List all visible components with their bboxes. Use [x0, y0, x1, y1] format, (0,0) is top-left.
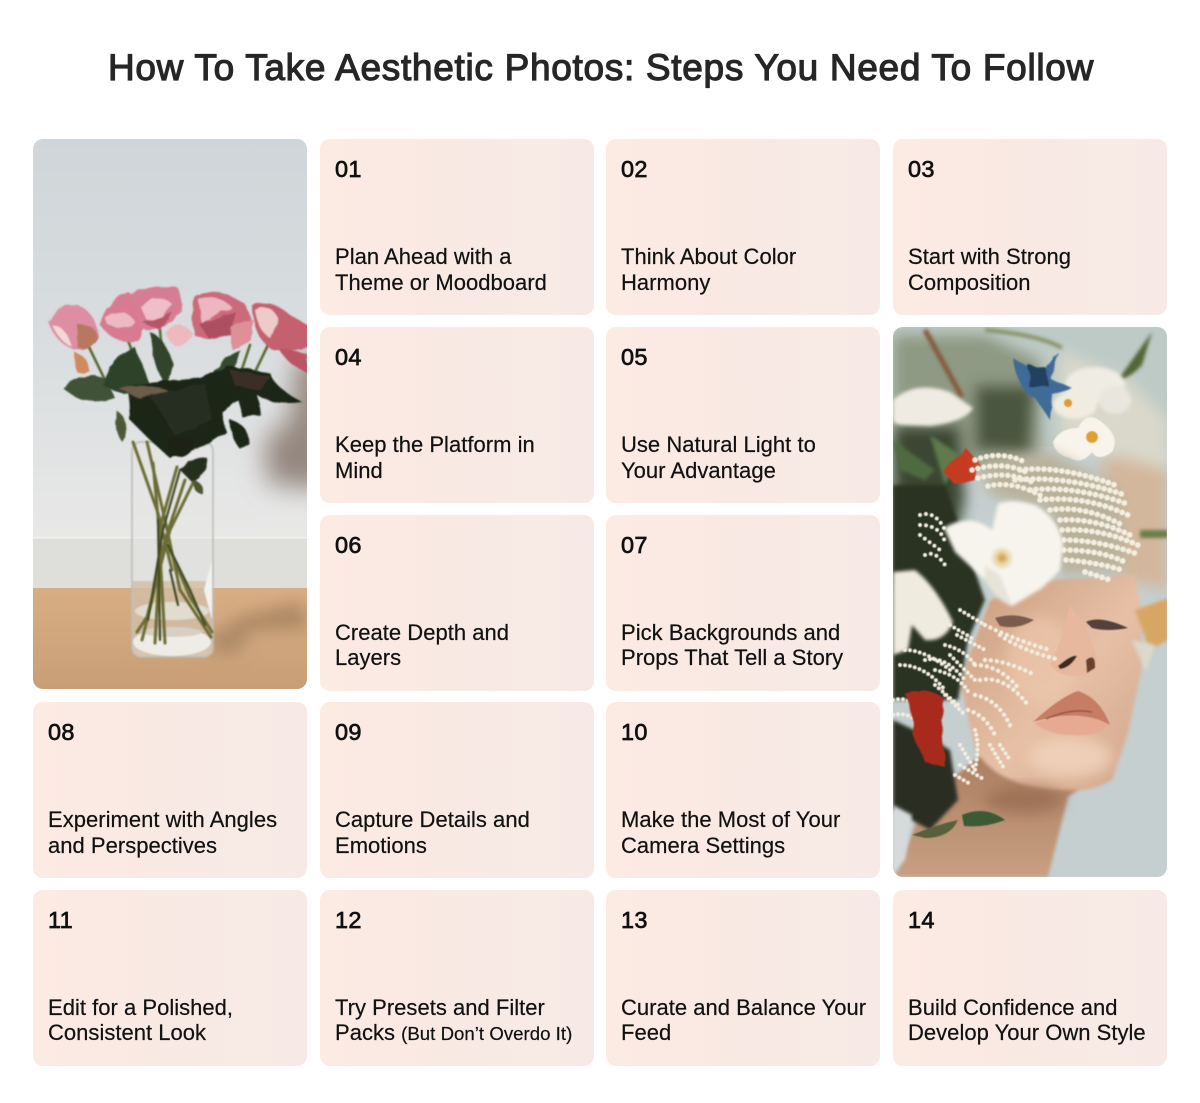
step label: Consistent Look — [48, 1020, 206, 1045]
photo: woman's face with flower crown — [893, 327, 1167, 877]
step number: 05 — [621, 344, 648, 370]
step label: Harmony — [621, 270, 710, 294]
rose stems — [88, 330, 268, 643]
photo: pink roses in a glass vase — [33, 139, 307, 689]
step label — [621, 807, 840, 858]
facial features — [995, 605, 1128, 736]
card 01 — [320, 139, 594, 315]
soft white blossoms, top right — [1053, 367, 1131, 419]
step number: 02 — [621, 156, 648, 182]
step number: 09 — [335, 719, 362, 745]
cherry blossom — [1053, 399, 1115, 460]
step label: Build Confidence and — [908, 994, 1118, 1020]
red petal — [903, 690, 945, 767]
step label — [335, 620, 509, 670]
step label: Camera Settings — [621, 832, 785, 858]
big white flower — [944, 501, 1063, 606]
leaves — [63, 332, 302, 495]
step number: 03 — [908, 156, 935, 182]
step label: Keep the Platform in — [335, 432, 535, 457]
card 02 — [606, 139, 880, 315]
blue cornflower — [1012, 352, 1072, 420]
dark foliage, lower left — [893, 720, 958, 830]
step number: 07 — [621, 532, 648, 558]
glass vase — [132, 442, 213, 657]
step label: Edit for a Polished, — [48, 994, 233, 1020]
step number: 13 — [621, 906, 648, 932]
card 05 — [606, 327, 880, 503]
step number: 08 — [48, 719, 75, 745]
white peony, left — [893, 388, 973, 426]
step label — [335, 994, 572, 1045]
card 09 — [320, 702, 594, 878]
neck and shoulder — [895, 740, 1090, 877]
neck leaves — [912, 811, 1005, 838]
step label: Experiment with Angles — [48, 807, 277, 832]
blurred background foliage — [893, 335, 1168, 590]
step label: Curate and Balance Your — [621, 994, 866, 1020]
step label: Try Presets and Filter — [335, 994, 545, 1020]
step label: and Perspectives — [48, 832, 217, 858]
step label: Plan Ahead with a — [335, 244, 511, 269]
red poppy — [942, 448, 982, 485]
step label — [335, 244, 547, 294]
step label — [335, 807, 530, 858]
step label: Theme or Moodboard — [335, 270, 547, 294]
step label — [48, 807, 277, 858]
step label: Pick Backgrounds and — [621, 620, 840, 644]
step label: Feed — [621, 1020, 671, 1045]
card 11 — [33, 890, 307, 1066]
step label: Capture Details and — [335, 807, 530, 832]
step number: 14 — [908, 906, 935, 932]
wall shadow — [264, 350, 330, 490]
title: How To Take Aesthetic Photos: Steps You Need To Follow — [108, 47, 1094, 88]
step number: 10 — [621, 719, 648, 745]
step label — [908, 994, 1146, 1045]
step label: Think About Color — [621, 244, 796, 269]
step number: 12 — [335, 906, 362, 932]
step label: Props That Tell a Story — [621, 645, 843, 670]
baby's breath mass — [980, 452, 1125, 575]
step label — [621, 994, 866, 1045]
card 06 — [320, 514, 594, 690]
step number: 06 — [335, 532, 362, 558]
step label — [48, 994, 233, 1045]
pink roses — [48, 286, 308, 373]
card 13 — [606, 890, 880, 1066]
step label: Composition — [908, 270, 1030, 294]
card 04 — [320, 327, 594, 503]
step label: Your Advantage — [621, 458, 776, 482]
step label — [335, 432, 535, 482]
floor shadows — [212, 602, 310, 655]
card 07 — [606, 514, 880, 690]
step label: Develop Your Own Style — [908, 1020, 1146, 1045]
card 03 — [893, 139, 1167, 315]
baby's breath sprays — [893, 455, 1140, 785]
step label — [621, 432, 816, 483]
step label — [908, 244, 1071, 295]
step label: Start with Strong — [908, 244, 1071, 269]
step label: Create Depth and — [335, 620, 509, 644]
card 14 — [893, 890, 1167, 1066]
face — [960, 575, 1142, 790]
step label — [621, 244, 796, 295]
step label: Mind — [335, 458, 383, 482]
step label: Layers — [335, 645, 401, 670]
step number: 01 — [335, 156, 362, 182]
white flower, lower left — [893, 570, 953, 655]
step label: Packs (But Don’t Overdo It) — [335, 1020, 572, 1045]
step label: Use Natural Light to — [621, 432, 816, 457]
step label — [621, 620, 844, 670]
step number: 11 — [48, 906, 73, 932]
card 10 — [606, 702, 880, 878]
step number: 04 — [335, 344, 362, 370]
step label: Make the Most of Your — [621, 807, 840, 832]
stems and leaves at top — [893, 330, 1168, 672]
card 12 — [320, 890, 594, 1066]
card 08 — [33, 702, 307, 878]
step label: Emotions — [335, 832, 427, 858]
